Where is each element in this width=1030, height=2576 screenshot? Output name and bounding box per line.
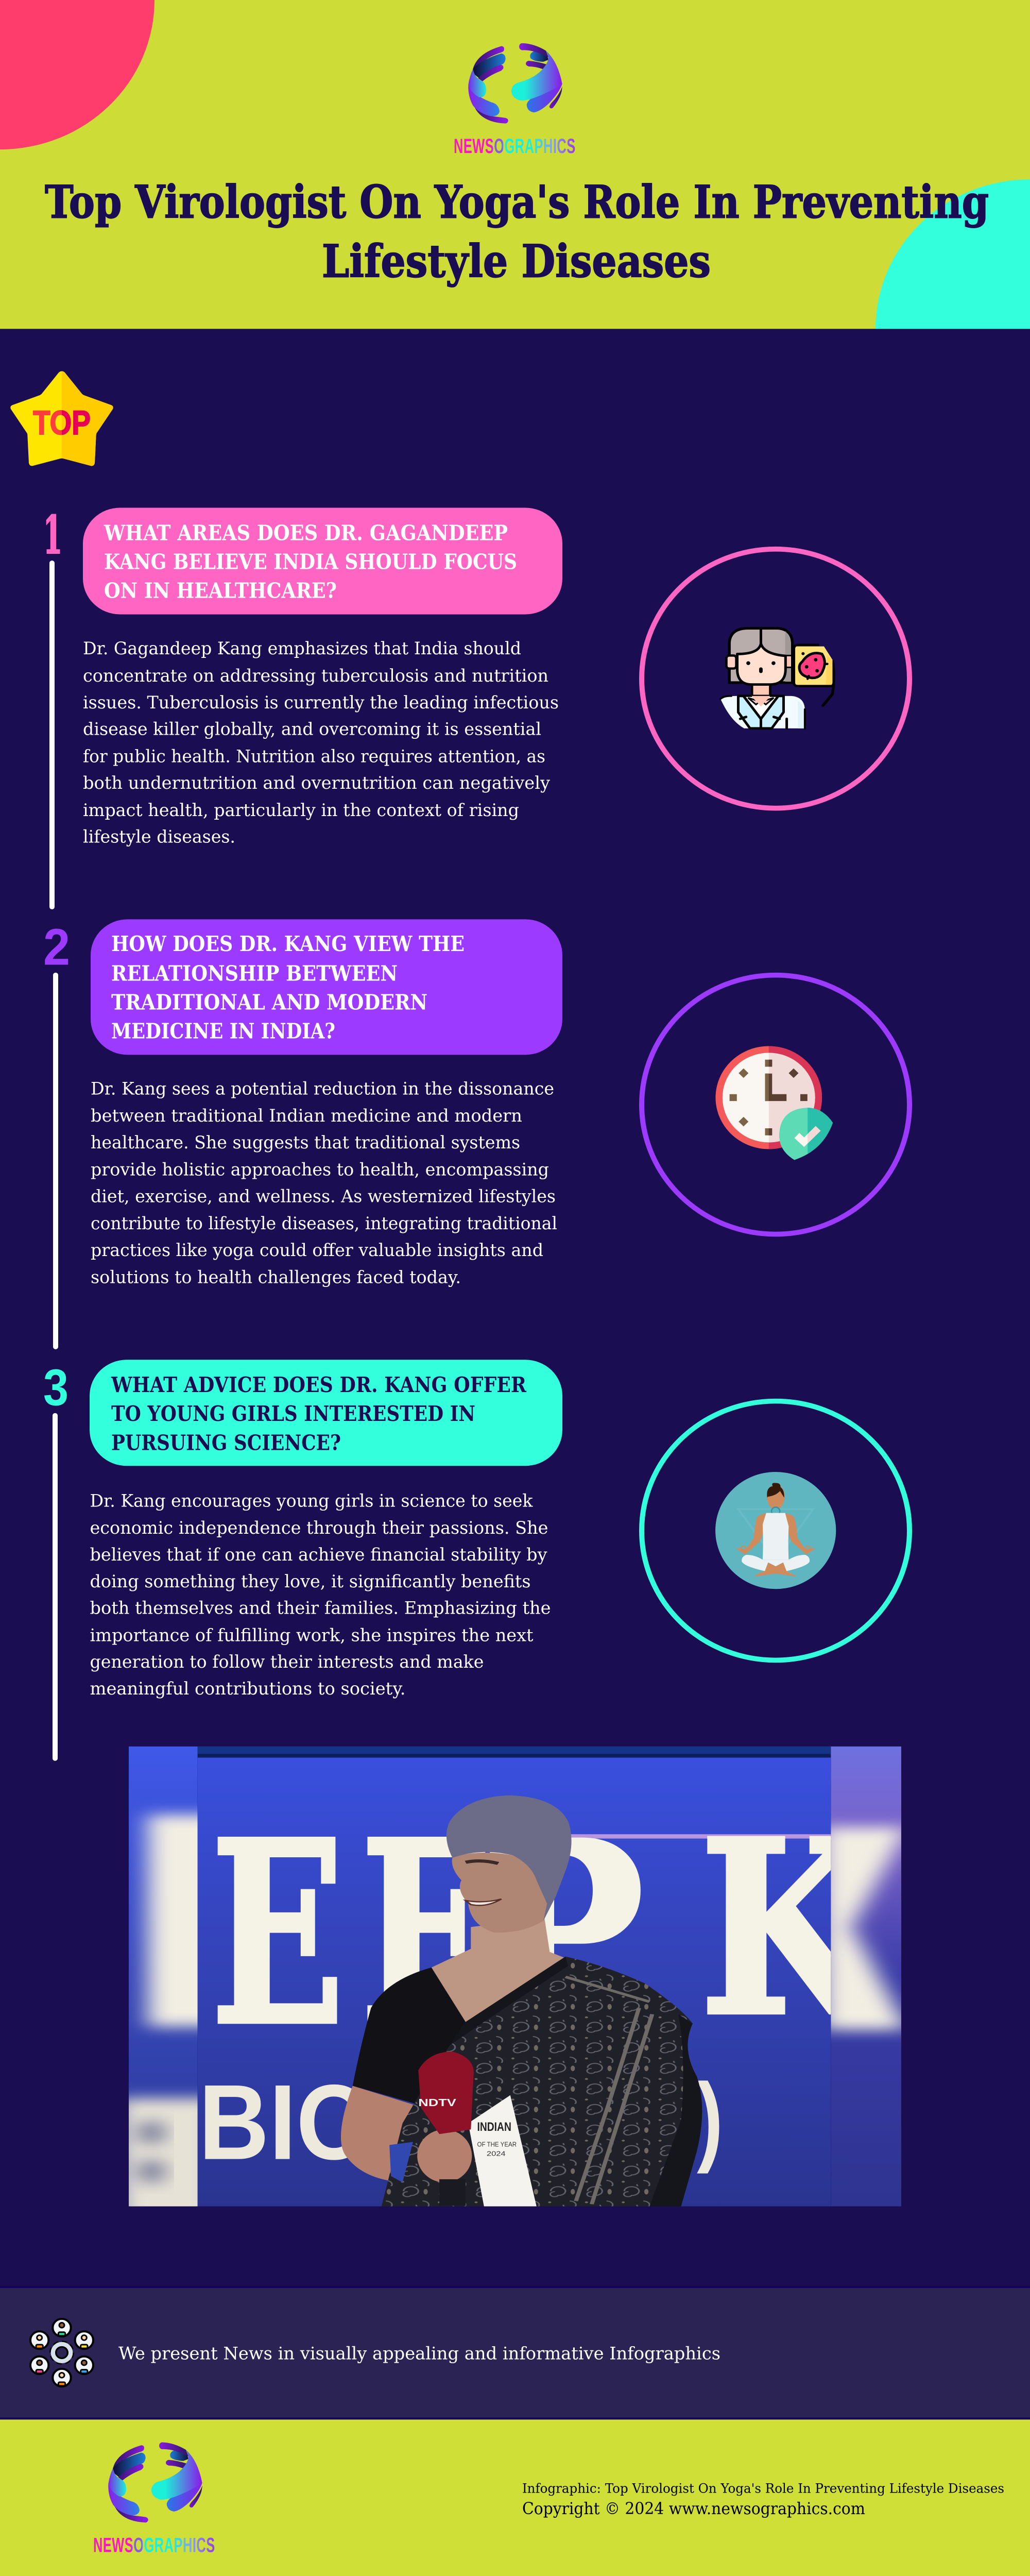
body text 2: contribute to lifestyle diseases, integrating traditional	[91, 1213, 557, 1234]
number 3: 3	[43, 1358, 68, 1416]
person: face	[452, 1853, 550, 1933]
heading 2	[91, 919, 562, 1055]
heading 1: WHAT AREAS DOES DR. GAGANDEEP	[104, 520, 508, 545]
footer credit text: Copyright © 2024 www.newsographics.com	[522, 2499, 865, 2518]
body text 3: economic independence through their passions. She	[90, 1518, 548, 1538]
blurred right photo margin	[831, 1747, 901, 2206]
title: Lifestyle Diseases	[322, 235, 711, 287]
timeline bar 2	[53, 973, 58, 1349]
panel: section 1	[43, 505, 909, 909]
person: hand holding card: 2024	[487, 2149, 506, 2157]
person: hand holding card: OF THE YEAR	[477, 2140, 517, 2148]
stage backdrop: E	[360, 1786, 494, 2081]
body text 1: lifestyle diseases.	[83, 827, 235, 847]
icon: TOP star badge: TOP	[33, 404, 91, 442]
number 1: 1	[43, 505, 62, 566]
body text 2: practices like yoga could offer valuable insights and	[91, 1241, 543, 1261]
heading 2: RELATIONSHIP BETWEEN	[111, 960, 398, 986]
stage backdrop: BIO	[199, 2062, 372, 2182]
panel: tagline band	[0, 2286, 1030, 2419]
logo: Newsographics	[454, 43, 575, 158]
stage backdrop	[198, 1747, 880, 2207]
body text 2: solutions to health challenges faced today.	[91, 1267, 461, 1287]
timeline bar 3	[53, 1413, 58, 1761]
body text 2: diet, exercise, and wellness. As westernized lifestyles	[91, 1187, 556, 1207]
tagline text: We present News in visually appealing and informative Infographics	[118, 2344, 720, 2364]
footer credit text: Infographic: Top Virologist On Yoga's Role In Preventing Lifestyle Diseases	[522, 2481, 1004, 2496]
person: neck and chest	[432, 1918, 565, 2024]
body text 2: Dr. Kang sees a potential reduction in the dissonance	[91, 1079, 554, 1099]
heading 2: MEDICINE IN INDIA?	[111, 1018, 335, 1043]
person: right arm	[627, 2102, 674, 2195]
panel: section 3	[43, 1358, 909, 1761]
ring 1	[642, 549, 909, 808]
heading 3	[90, 1360, 562, 1466]
microphone	[418, 2052, 474, 2206]
microphone: NDTV	[418, 2097, 456, 2109]
body text 3: believes that if one can achieve financial stability by	[90, 1545, 547, 1565]
person: short grey hair	[447, 1795, 572, 1921]
icon: TOP star badge	[10, 371, 113, 466]
body text 1: issues. Tuberculosis is currently the leading infectious	[83, 693, 559, 713]
body text 2: provide holistic approaches to health, encompassing	[91, 1160, 549, 1180]
body text 1: impact health, particularly in the context of rising	[83, 801, 519, 821]
timeline bar 1	[49, 561, 55, 909]
stage backdrop: E	[211, 1786, 345, 2081]
icon: doctor with virus sign	[720, 628, 834, 729]
heading 1: KANG BELIEVE INDIA SHOULD FOCUS	[104, 549, 517, 574]
body text 1: both undernutrition and overnutrition can negatively	[83, 773, 551, 793]
body text 3: Dr. Kang encourages young girls in science to seek	[90, 1491, 534, 1511]
stage backdrop: )	[697, 2062, 723, 2175]
heading 1: ON IN HEALTHCARE?	[104, 578, 337, 603]
heading 2: HOW DOES DR. KANG VIEW THE	[111, 931, 465, 956]
heading 3: PURSUING SCIENCE?	[111, 1430, 341, 1455]
body text 3	[90, 1491, 551, 1699]
title	[45, 176, 989, 287]
icon: people around gear	[30, 2319, 93, 2386]
body text 3: meaningful contributions to society.	[90, 1679, 406, 1699]
icon: clock with check shield	[715, 1046, 833, 1160]
person: smile and eyes	[466, 1899, 501, 1905]
icon: yoga meditation figure	[715, 1472, 836, 1589]
logo: Newsographics: NEWSOGRAPHICS	[454, 135, 575, 158]
body text 2: between traditional Indian medicine and modern	[91, 1106, 522, 1126]
blurred left photo margin	[129, 1747, 198, 2206]
body text 3: generation to follow their interests and make	[90, 1652, 484, 1672]
body text 3: importance of fulfilling work, she inspires the next	[90, 1625, 534, 1646]
decorative pink quarter circle	[0, 0, 154, 149]
number 2: 2	[43, 918, 70, 976]
person: hand holding card	[389, 2095, 537, 2207]
panel: header	[0, 0, 1030, 329]
body text 2: healthcare. She suggests that traditional systems	[91, 1133, 520, 1153]
body text 1	[83, 638, 559, 847]
footer logo	[93, 2442, 215, 2557]
person: blouse and arm	[353, 1968, 466, 2105]
panel: section 2	[43, 918, 909, 1349]
heading 3: TO YOUNG GIRLS INTERESTED IN	[111, 1401, 475, 1426]
footer logo: NEWSOGRAPHICS	[93, 2534, 215, 2557]
ring 3	[642, 1401, 909, 1660]
body text 3: both themselves and their families. Emphasizing the	[90, 1598, 551, 1618]
heading 2: TRADITIONAL AND MODERN	[111, 989, 427, 1014]
photo: Dr. Gagandeep Kang at the award stage	[119, 1747, 907, 2229]
body text 3: doing something they love, it significantly benefits	[90, 1572, 530, 1592]
body text 2	[91, 1079, 557, 1287]
ring 2	[642, 975, 909, 1234]
person: patterned saree	[382, 1957, 702, 2207]
panel: footer	[0, 2419, 1030, 2576]
footer credit text	[522, 2481, 1004, 2518]
stage backdrop: P	[482, 1790, 644, 2071]
body text 1: Dr. Gagandeep Kang emphasizes that India should	[83, 638, 521, 659]
decorative cyan quarter circle	[876, 179, 1030, 329]
body text 1: concentrate on addressing tuberculosis and nutrition	[83, 666, 548, 686]
heading 3: WHAT ADVICE DOES DR. KANG OFFER	[111, 1372, 527, 1397]
body text 1: for public health. Nutrition also requires attention, as	[83, 747, 545, 767]
heading 1	[83, 507, 562, 614]
body text 1: disease killer globally, and overcoming it is essential	[83, 719, 541, 739]
person: hand holding card: INDIAN	[477, 2120, 511, 2134]
